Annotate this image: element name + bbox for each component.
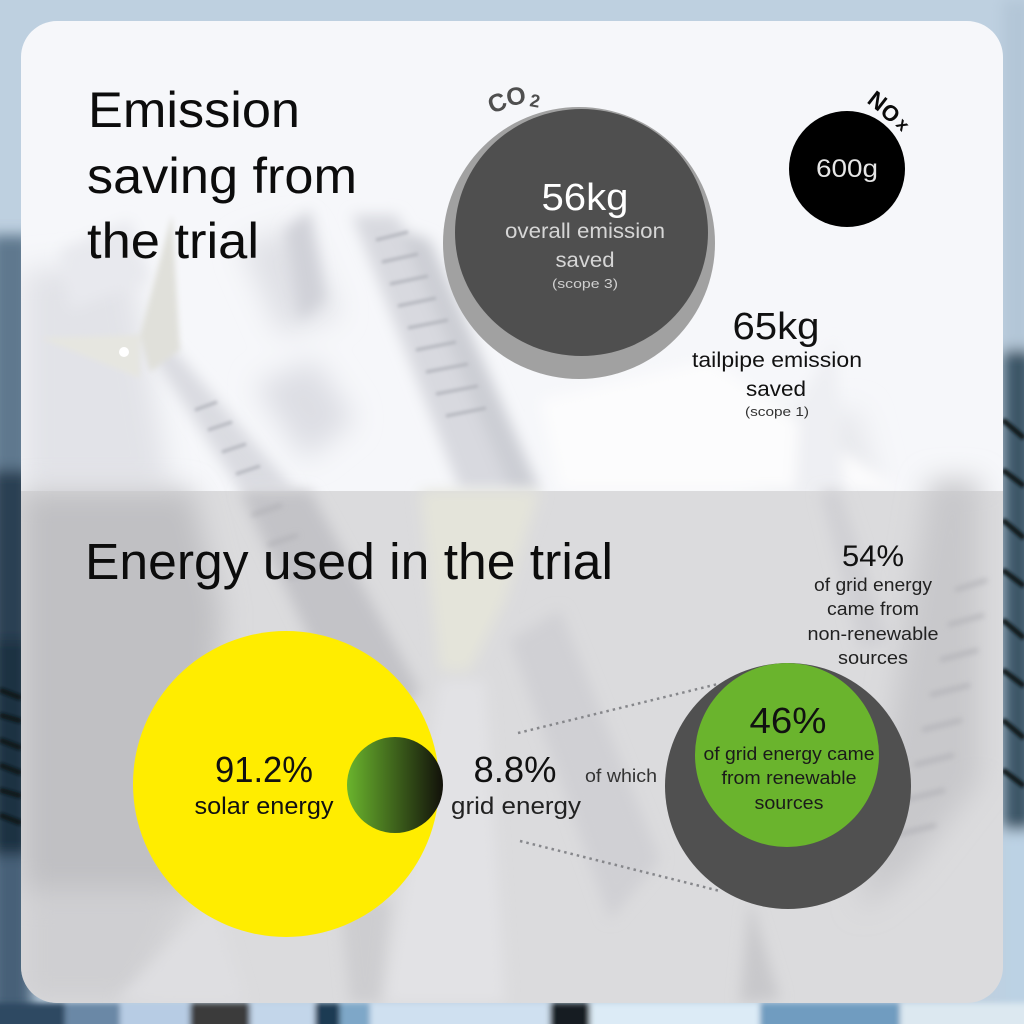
CO2 curved label: O [504,82,528,112]
title: emission saving [87,82,357,269]
CO2 inner circle: overall emission saved: (scope 3) [552,276,618,291]
CO2 inner circle: overall emission saved: 56kg [542,177,628,219]
callout: non-renewable share: non-renewable [808,624,938,644]
grid energy label [451,749,581,820]
callout: tailpipe emission saved: (scope 1) [745,404,809,419]
fish tail [111,221,182,374]
CO2 curved label: C [484,87,511,120]
CO2 curved label: 2 [528,90,542,112]
NOx circle [789,111,905,227]
CO2 outer circle: tailpipe scope 1 [443,107,715,379]
title: emission saving: the trial [87,213,259,269]
title: emission saving: Emission [88,82,300,138]
NOx circle: 600g [816,155,878,183]
callout: non-renewable share: sources [838,648,908,668]
grid energy label: grid energy [451,793,581,820]
NOx curved label: N [863,85,892,116]
grid split inner circle: renewable: sources [754,792,824,813]
panel: upper frosted section [21,21,1003,491]
callout: non-renewable share [808,540,938,668]
CO2 inner circle: overall emission saved: saved [556,249,614,272]
title: emission saving: saving from [87,148,357,204]
callout: non-renewable share: 54% [842,540,904,573]
grid split inner circle: renewable: from renewable [722,767,856,788]
NOx curved label [863,85,913,135]
callout: non-renewable share: came from [827,599,919,619]
grid split inner circle: renewable: of grid energy came [704,743,874,764]
callout: tailpipe emission saved [692,306,862,419]
text: of which: of which [585,766,657,786]
callout: tailpipe emission saved: tailpipe emission [692,349,862,372]
NOx curved label: O [876,98,905,128]
solar energy circle [133,631,439,937]
callout: non-renewable share: of grid energy [814,575,932,595]
CO2 inner circle: overall emission saved [455,109,708,356]
CO2 inner circle: overall emission saved: overall emission [505,220,665,243]
solar energy circle: solar energy [194,793,334,820]
NOx curved label: x [892,114,913,135]
grid split inner circle: renewable: 46% [750,700,826,741]
callout: tailpipe emission saved: saved [746,378,806,401]
callout: tailpipe emission saved: 65kg [732,306,820,348]
dotted connector lines [518,684,720,891]
grid split outer circle: non-renewable [665,663,911,909]
grid energy label: 8.8% [474,749,556,790]
solar energy circle: 91.2% [215,749,313,790]
CO2 curved label [484,82,542,120]
grid split inner circle: renewable [695,663,879,847]
title: energy used: Energy used in the trial [85,533,613,590]
grid energy gradient circle [347,737,443,833]
panel: lower grey section [21,480,1003,1003]
